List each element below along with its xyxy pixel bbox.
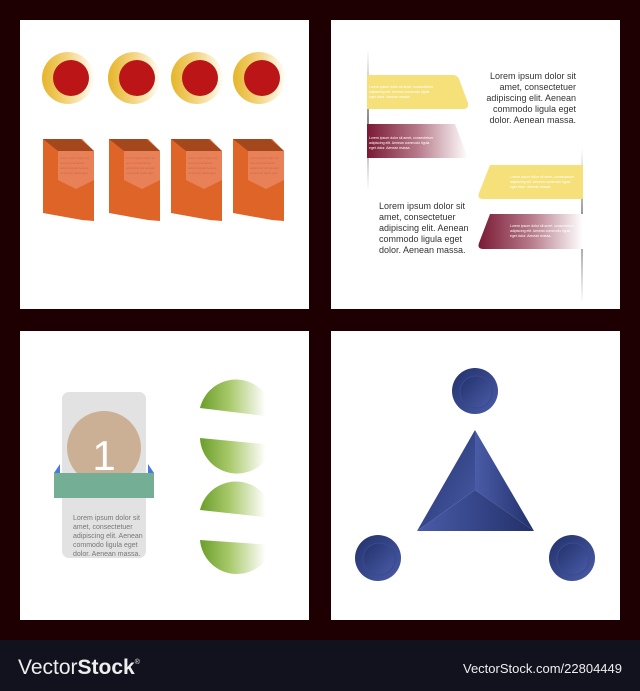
footer (0, 640, 640, 691)
card: adipiscing elit. Aenean (73, 533, 143, 540)
text block left: Lorem ipsum dolor sit (379, 201, 466, 211)
maroon bar 4: eget dolor. Aenean massa. (510, 234, 551, 238)
text block left: amet, consectetuer (379, 212, 456, 222)
maroon bar 4: Lorem ipsum dolor sit amet, consectetuer (510, 224, 575, 228)
maroon bar 2: adipiscing elit. Aenean commodo ligula (369, 141, 429, 145)
panel: bottom-left (20, 331, 309, 620)
text block left (379, 201, 469, 255)
text block right: Lorem ipsum dolor sit (490, 71, 576, 81)
text block left: adipiscing elit. Aenean (379, 223, 469, 233)
icon: gold circles (42, 52, 285, 104)
panel: bottom-right (331, 331, 620, 620)
footer: VectorStock (18, 656, 135, 679)
card: Lorem ipsum dolor sit (73, 515, 140, 522)
orange folded banners: adipiscing elit Aenean (60, 166, 89, 170)
orange folded banners: amet consectetuer (60, 161, 85, 165)
maroon bar 4 (478, 214, 583, 249)
text block left: dolor. Aenean massa. (379, 245, 466, 255)
orange folded banners: commodo ligula eget (60, 171, 88, 175)
yellow bar 1: adipiscing elit. Aenean commodo ligula (369, 90, 429, 94)
text block right (486, 71, 576, 125)
yellow bar 3 (478, 165, 583, 199)
yellow bar 1: Lorem ipsum dolor sit amet, consectetuer (369, 85, 434, 89)
card: dolor. Aenean massa. (73, 551, 140, 558)
orange folded banners (43, 139, 284, 221)
triangle (417, 430, 534, 531)
panel: top-left (20, 20, 309, 309)
yellow bar 1: eget dolor. Aenean massa. (369, 95, 410, 99)
footer: VectorStock.com/22804449 (463, 661, 622, 676)
text block right: commodo ligula eget (493, 104, 576, 114)
text block right: adipiscing elit. Aenean (486, 93, 576, 103)
maroon bar 4: adipiscing elit. Aenean commodo ligula (510, 229, 570, 233)
green half circles (200, 380, 273, 574)
card: amet, consectetuer (73, 524, 133, 531)
maroon bar 2: Lorem ipsum dolor sit amet, consectetuer (369, 136, 434, 140)
text block right: dolor. Aenean massa. (489, 115, 576, 125)
card: 1 (92, 432, 116, 479)
panel: top-right (331, 20, 620, 309)
yellow bar 3: Lorem ipsum dolor sit amet, consectetuer (510, 175, 575, 179)
footer: ® (135, 658, 141, 666)
maroon bar 2: eget dolor. Aenean massa. (369, 146, 410, 150)
yellow bar 3: adipiscing elit. Aenean commodo ligula (510, 180, 570, 184)
card: commodo ligula eget (73, 542, 138, 549)
maroon bar 2 (367, 124, 468, 158)
text block left: commodo ligula eget (379, 234, 463, 244)
orange folded banners: Lorem ipsum dolor sit (60, 156, 89, 160)
yellow bar 1 (367, 75, 468, 109)
circles (355, 368, 595, 581)
yellow bar 3: eget dolor. Aenean massa. (510, 185, 551, 189)
card (54, 392, 154, 558)
text block right: amet, consectetuer (499, 82, 576, 92)
